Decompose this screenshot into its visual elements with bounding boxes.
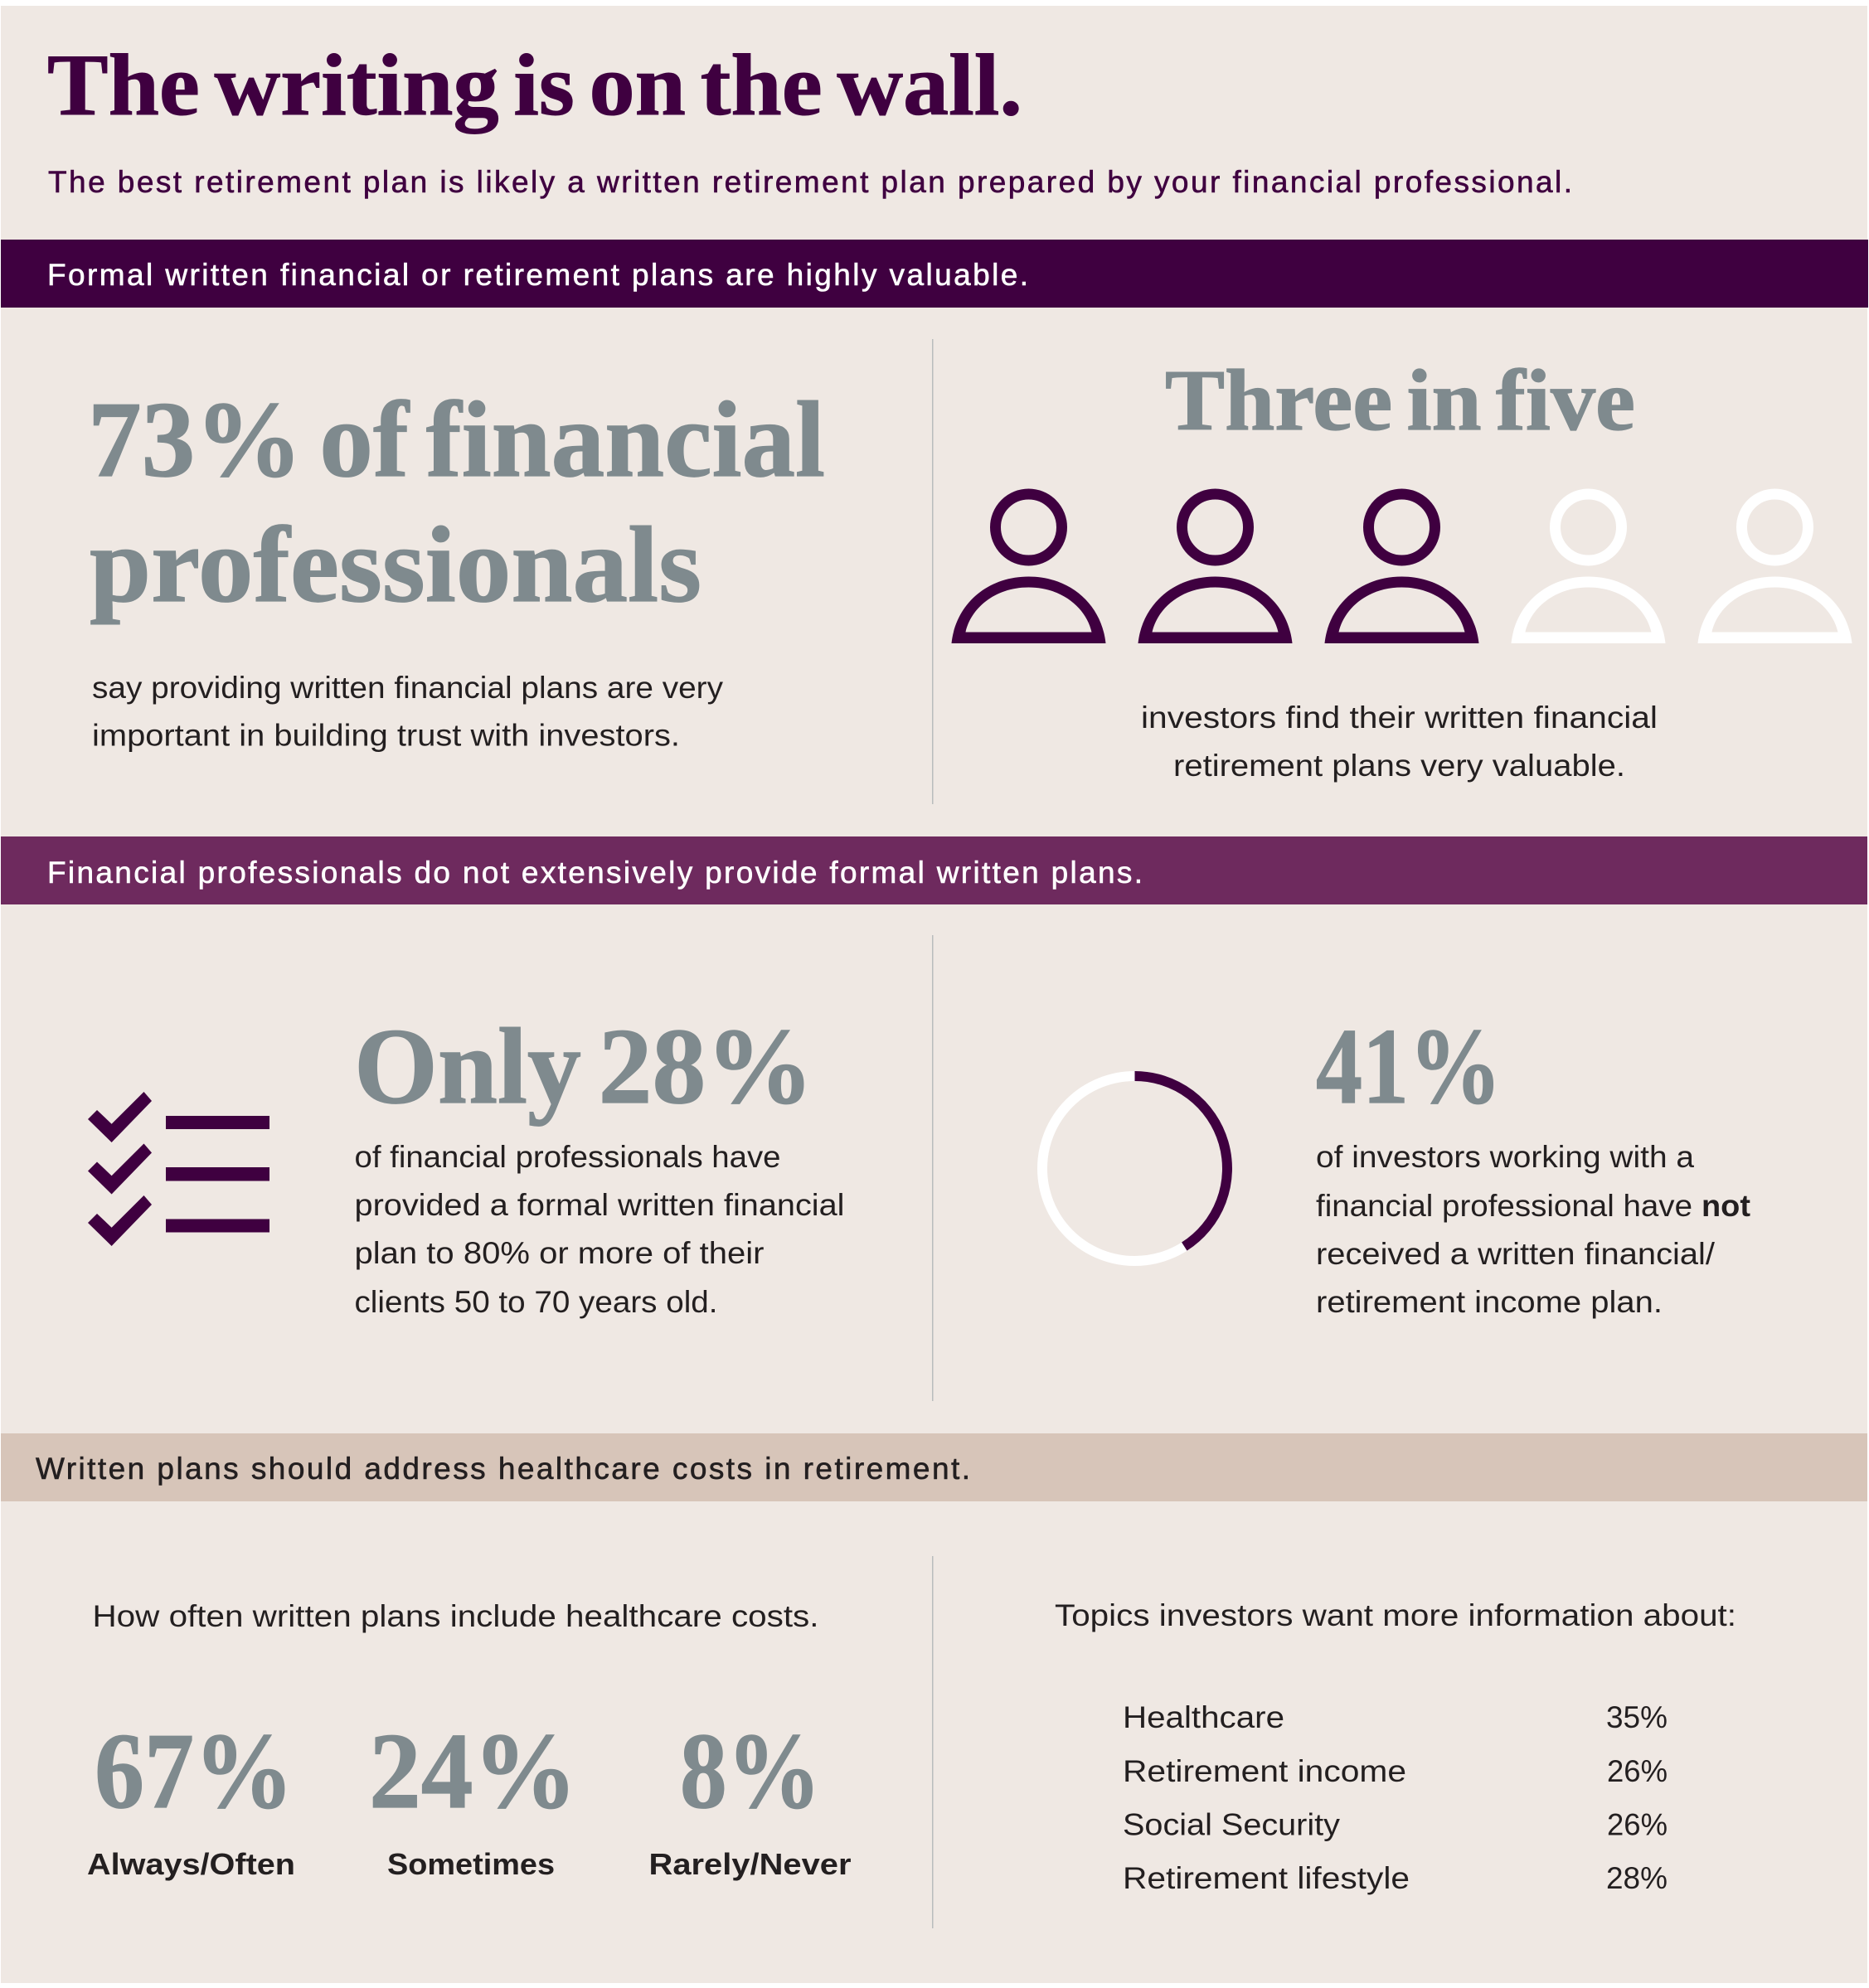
stat: sometimes: 24% <box>369 1711 577 1831</box>
icon: person 2 <box>1138 494 1292 643</box>
description: retirement income plan. <box>1316 1285 1663 1319</box>
description <box>1141 701 1658 783</box>
section banner: value of plans: Formal written financial or retirement plans are highly valuable. <box>47 258 1028 292</box>
section banner: healthcare costs: Written plans should address healthcare costs in retirement. <box>36 1452 970 1486</box>
header <box>47 36 1572 199</box>
stat: sometimes: Sometimes <box>387 1847 555 1881</box>
panel: three in five <box>952 352 1852 783</box>
description: received a written financial/ <box>1316 1237 1716 1271</box>
section banner: plans not provided: Financial professionals do not extensively provide formal written plans. <box>47 856 1143 890</box>
section banner: healthcare costs <box>1 1433 1867 1501</box>
description: plan to 80% or more of their <box>355 1236 765 1270</box>
icon: person 5 <box>1698 494 1852 643</box>
stat: always/often: Always/Often <box>87 1847 295 1881</box>
table: topics and percentages: Retirement income <box>1123 1754 1406 1788</box>
title: The writing is on the wall. <box>47 36 1022 133</box>
big statistic: 73% of financial <box>88 380 825 500</box>
description <box>92 671 724 753</box>
description: clients 50 to 70 years old. <box>355 1285 718 1319</box>
table: topics and percentages: Retirement lifestyle <box>1123 1861 1410 1895</box>
icon: person 1 <box>952 494 1106 643</box>
panel: topics investors want <box>1055 1598 1736 1895</box>
description <box>355 1140 844 1319</box>
table: topics and percentages: Social Security <box>1123 1807 1341 1842</box>
description: financial professional have <box>1316 1189 1692 1223</box>
icon: checklist <box>88 1092 269 1246</box>
table: topics and percentages <box>1123 1700 1668 1895</box>
description: investors find their written financial <box>1141 701 1658 735</box>
description: provided a formal written financial <box>355 1188 844 1222</box>
stat: rarely/never <box>648 1711 851 1881</box>
panel: healthcare frequency <box>87 1599 851 1881</box>
description: of financial professionals have <box>355 1140 781 1174</box>
table: topics and percentages: 26% <box>1607 1754 1668 1788</box>
heading: Topics investors want more information about: <box>1055 1598 1736 1632</box>
big statistic: professionals <box>90 505 701 625</box>
table: topics and percentages: Healthcare <box>1123 1700 1284 1734</box>
big statistic: Only 28% <box>354 1006 813 1127</box>
icon: person 3 <box>1325 494 1479 643</box>
description: important in building trust with investors. <box>92 718 680 753</box>
description <box>1316 1140 1750 1319</box>
panel: only 28% <box>88 1006 844 1319</box>
big statistic: Three in five <box>1165 352 1635 449</box>
stat: rarely/never: Rarely/Never <box>648 1847 851 1881</box>
stat: rarely/never: 8% <box>680 1711 821 1831</box>
panel: 73% of financial professionals <box>88 380 825 753</box>
table: topics and percentages: 35% <box>1606 1700 1668 1734</box>
big statistic <box>88 380 825 625</box>
stat: always/often <box>87 1711 295 1881</box>
table: topics and percentages: 28% <box>1606 1861 1668 1895</box>
panel: 41% <box>1042 1006 1750 1319</box>
icon: five people, three highlighted <box>952 494 1852 643</box>
description: not <box>1702 1189 1750 1223</box>
section banner: value of plans <box>1 240 1868 308</box>
description: say providing written financial plans are very <box>92 671 724 705</box>
big statistic: 41% <box>1316 1006 1502 1127</box>
donut chart: 41% <box>1042 1076 1227 1261</box>
table: topics and percentages: 26% <box>1607 1807 1668 1842</box>
description: retirement plans very valuable. <box>1173 749 1625 783</box>
stat: sometimes <box>369 1711 577 1881</box>
icon: person 4 <box>1511 494 1665 643</box>
section banner: plans not provided <box>1 836 1867 904</box>
subtitle: The best retirement plan is likely a written retirement plan prepared by your financial professional. <box>48 165 1572 199</box>
stat: always/often: 67% <box>95 1711 294 1831</box>
description: of investors working with a <box>1316 1140 1694 1174</box>
heading: How often written plans include healthcare costs. <box>93 1599 819 1633</box>
